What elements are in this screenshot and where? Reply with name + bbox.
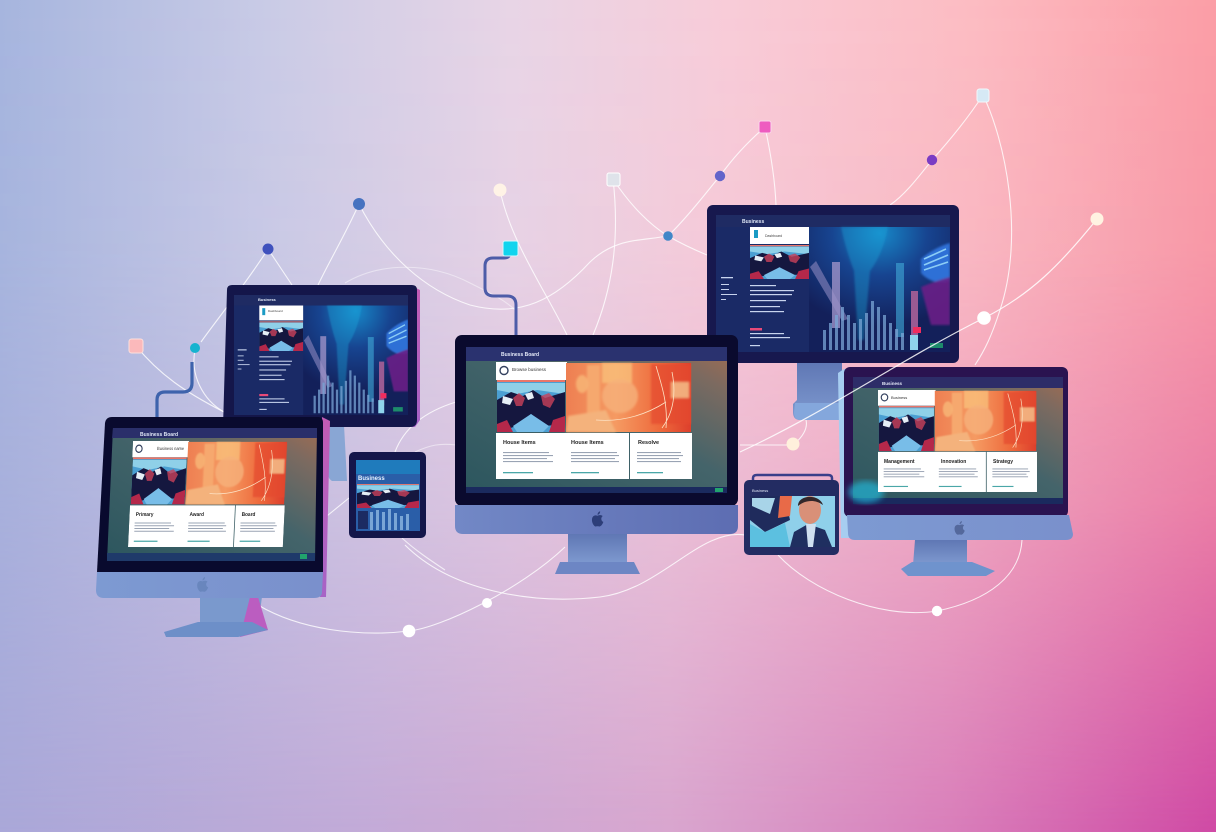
screen: Dashboard (268, 309, 283, 313)
content card: Award (189, 512, 204, 518)
content card: Resolve (638, 440, 659, 446)
monitor: centre (455, 335, 738, 574)
content card: Business (891, 395, 907, 400)
node: purple dot (927, 155, 937, 165)
video image (750, 496, 835, 547)
node: violet dot (715, 171, 725, 181)
node: white dot (482, 598, 492, 608)
stand (901, 540, 995, 576)
connection lines behind devices (136, 95, 1022, 633)
content card: House Items (571, 440, 604, 446)
node: cream dot (1090, 212, 1104, 226)
stand (328, 425, 347, 481)
screen: Business Board (140, 432, 178, 438)
content card: Business name (157, 446, 185, 451)
content card: Board (242, 512, 256, 518)
content card: House Items (503, 440, 536, 446)
monitor: front left (96, 417, 330, 637)
node: cyan square (503, 241, 518, 256)
icon: apple logo (592, 511, 603, 527)
monitor: right (838, 367, 1073, 576)
screen (716, 215, 950, 352)
node: white dot (977, 311, 991, 325)
node: indigo dot (262, 244, 274, 254)
node: white dot (932, 606, 942, 616)
icon: apple logo (197, 577, 208, 592)
node: white dot (403, 625, 415, 637)
chin (455, 505, 738, 534)
connector: blue pipe left (157, 362, 192, 418)
content card: Primary (136, 512, 154, 518)
node: blue dot (353, 198, 365, 210)
screen: Business (882, 381, 903, 386)
content card: Management (884, 459, 915, 465)
node: cream dot (786, 438, 800, 450)
icon: apple logo (955, 521, 965, 535)
node: light blue square (977, 89, 989, 102)
stand (555, 534, 640, 574)
screen (466, 347, 727, 493)
stand (793, 362, 842, 420)
screen (234, 295, 408, 415)
content card (128, 441, 288, 547)
chin (96, 572, 323, 598)
chin (847, 515, 1073, 540)
content card: Innovation (941, 459, 966, 465)
connection line over devices (740, 219, 1097, 452)
network nodes (129, 89, 1104, 637)
tablet: video call: Business (752, 488, 768, 493)
content card (878, 390, 1037, 492)
node: cyan dot (190, 343, 200, 353)
side panel (838, 369, 850, 538)
screen: Business (258, 297, 277, 302)
stand (164, 597, 268, 637)
screen (848, 377, 1063, 504)
content card: Strategy (993, 459, 1013, 465)
node: magenta square (759, 121, 771, 133)
screen: Business Board (501, 352, 539, 358)
node: cream dot (494, 184, 506, 196)
content card: Browse business (512, 367, 547, 372)
tablet: small left: Business (358, 476, 385, 482)
tablet: video call (744, 475, 839, 555)
node: pale square (607, 173, 620, 186)
content card (496, 362, 692, 479)
screen (107, 428, 317, 561)
node: blue dot (663, 231, 673, 241)
screen: Dashboard (765, 234, 782, 238)
monitor: back left dark (223, 285, 420, 481)
side panel (320, 417, 330, 597)
screen: Business (742, 219, 764, 225)
connector: blue pipe centre (485, 252, 516, 335)
tablet: small left (349, 452, 426, 538)
node: pink square (129, 339, 143, 353)
monitor: back right dark (707, 205, 959, 420)
